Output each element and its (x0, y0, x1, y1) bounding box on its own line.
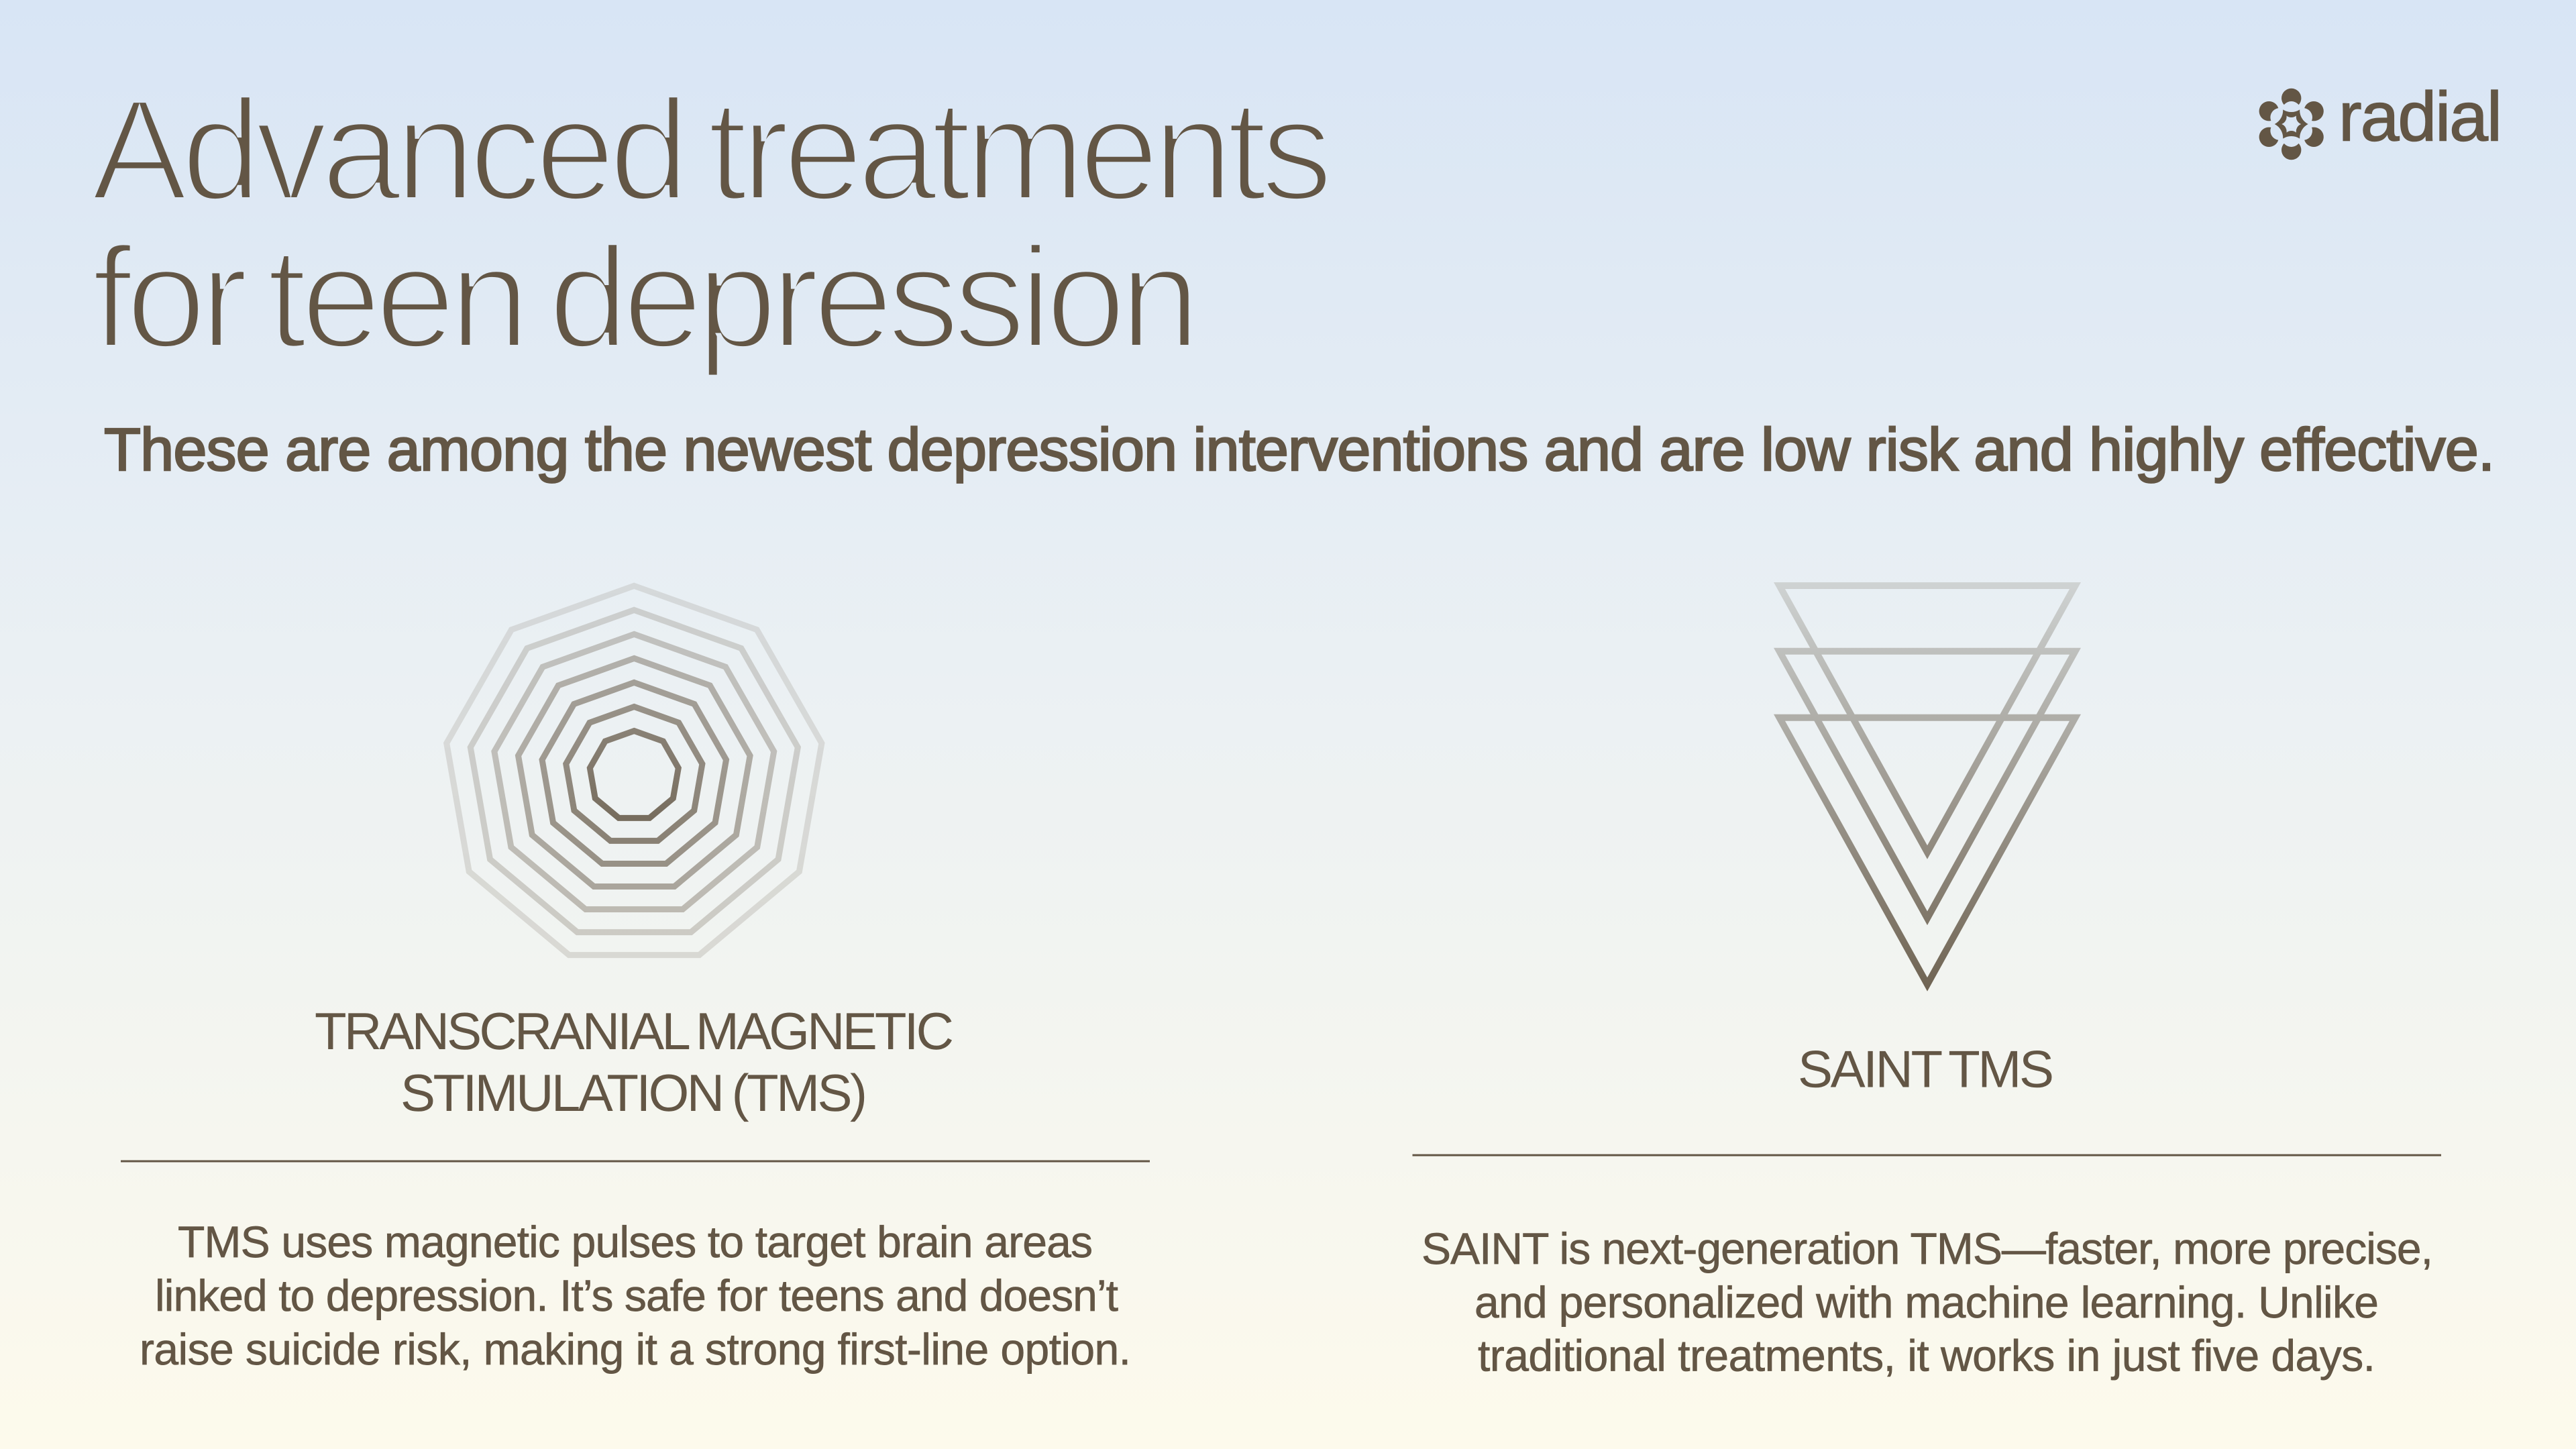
panel: TMS (121, 586, 1150, 1374)
heading: TMS (315, 1002, 954, 1122)
heading: SAINT TMS: SAINT TMS (1798, 1040, 2054, 1099)
title: Advanced treatments (91, 68, 1333, 231)
text: SAINT description: SAINT is next-generation TMS—faster, more precise, (1421, 1224, 2433, 1273)
icon: concentric nonagons (447, 586, 822, 955)
title: for teen depression (92, 216, 1200, 378)
text: SAINT description: traditional treatments, it works in just five days. (1478, 1331, 2375, 1381)
text: SAINT description (1421, 1224, 2433, 1381)
text: SAINT description: and personalized with machine learning. Unlike (1474, 1277, 2379, 1327)
text: TMS description (140, 1217, 1131, 1374)
text: TMS description: linked to depression. It’s safe for teens and doesn’t (155, 1271, 1118, 1320)
title (91, 68, 1333, 378)
text: TMS description: TMS uses magnetic pulses to target brain areas (178, 1217, 1093, 1267)
icon: stacked triangles (1779, 586, 2076, 984)
heading: TMS: STIMULATION (TMS) (400, 1063, 867, 1122)
text: TMS description: raise suicide risk, making it a strong first-line option. (140, 1324, 1131, 1374)
logo: radial (2259, 78, 2502, 160)
subtitle: These are among the newest depression interventions and are low risk and highly effective. (104, 417, 2495, 484)
icon: radial flower mark (2259, 89, 2324, 160)
logo wordmark: radial (2339, 78, 2502, 156)
panel: SAINT TMS (1413, 586, 2441, 1381)
heading: TMS: TRANSCRANIAL MAGNETIC (315, 1002, 954, 1061)
